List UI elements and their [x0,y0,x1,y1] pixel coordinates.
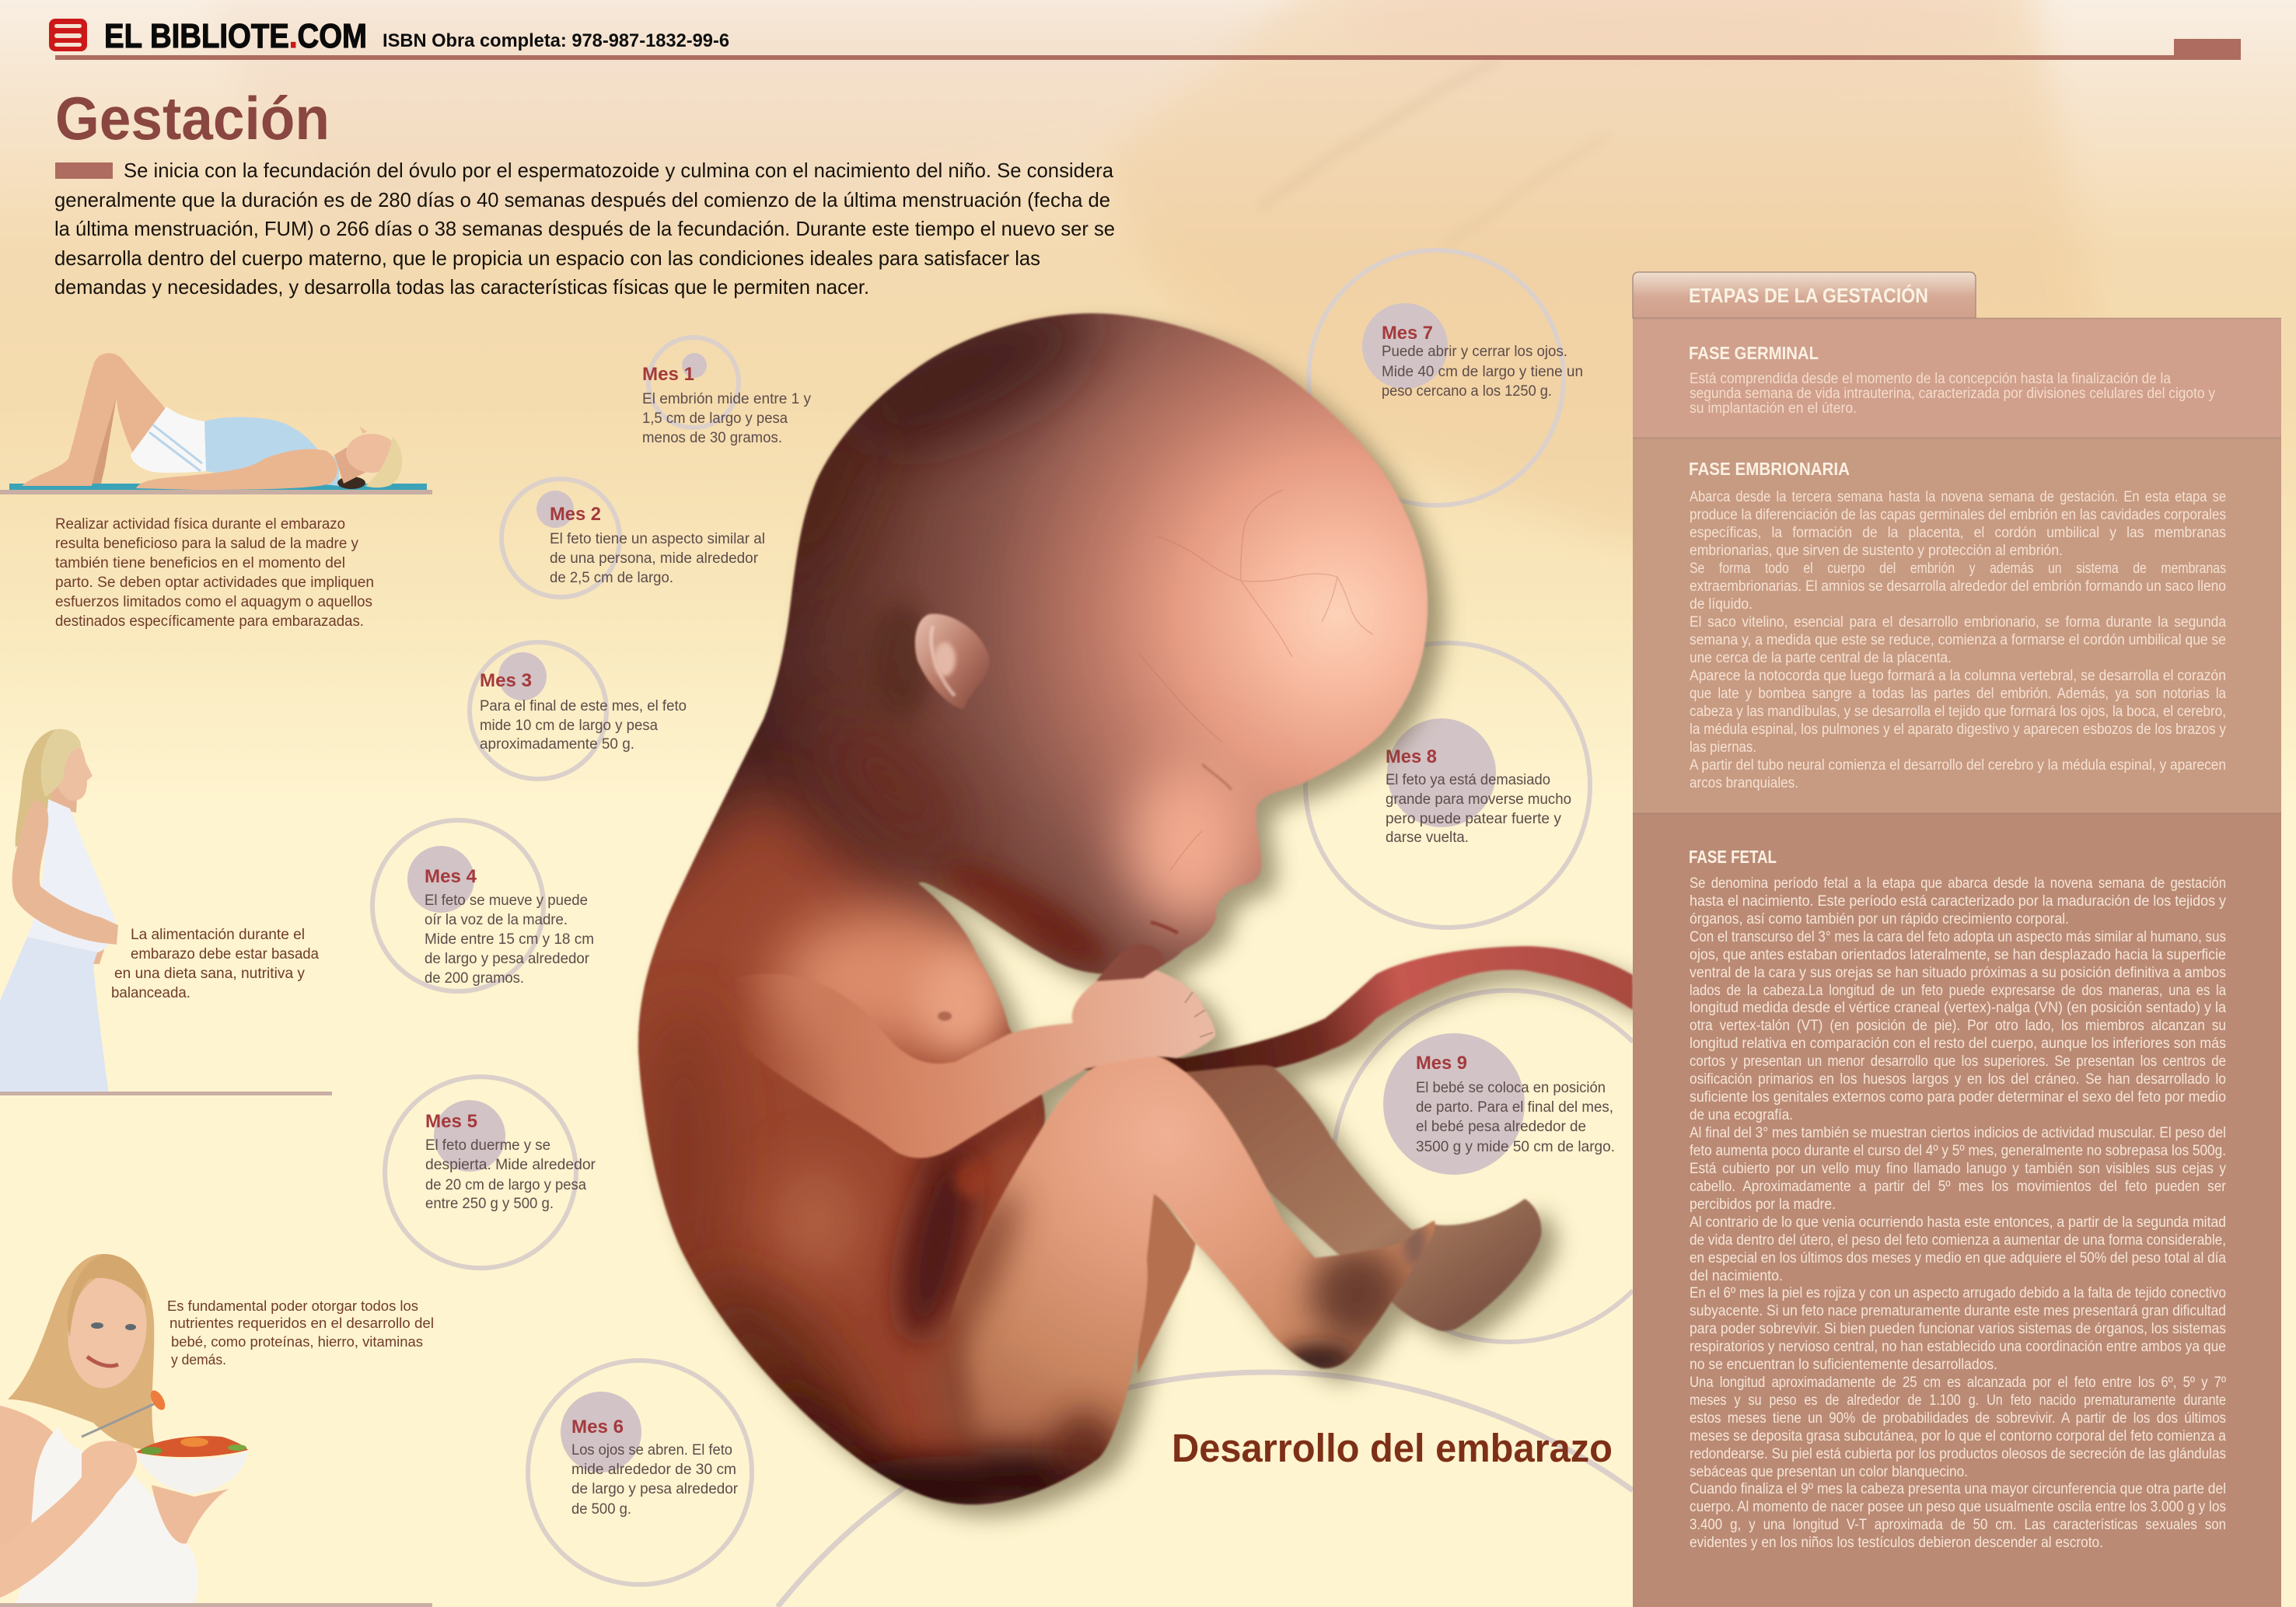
month 9: de parto. Para el final del mes, [1416,1099,1613,1116]
month 6: de 500 g. [571,1501,631,1518]
month 5: El feto duerme y se [425,1137,550,1154]
section: fase fetal [1633,813,2281,1607]
month 4 [372,820,594,991]
section: fase germinal: segunda semana de vida intrauterina, caracterizada por divisiones celulares del cigoto y [1690,386,2215,402]
month 2: El feto tiene un aspecto similar al [550,531,765,547]
month 4: Mes 4 [425,866,477,887]
section: fase fetal: no se encuentran lo suficientemente desarrollados. [1690,1357,1997,1373]
month 7: peso cercano a los 1250 g. [1382,383,1552,400]
month 5: de 20 cm de largo y pesa [425,1177,586,1193]
section: fase fetal: Al final del 3° mes también se muestran ciertos indicios de actividad muscular. El peso del [1690,1125,2226,1141]
far leg [1138,1065,1542,1375]
section: fase embrionaria: semana y, a medida que este se reduce, comienza a formarse el cordón umbilical que se [1690,632,2226,648]
month 1: Mes 1 [642,364,694,385]
text: physical activity [55,516,374,630]
logo wordmark: EL BIBLIOTE.COM [104,17,367,55]
text: nutrition: La alimentación durante el [131,927,305,943]
month 6 [528,1361,752,1584]
month 4: Mide entre 15 cm y 18 cm [425,931,594,948]
section: fase embrionaria: que late y bombea sangre a todas las partes del embrión. Además, ya son notorias la [1690,686,2226,702]
text: physical activity: parto. Se deben optar actividades que impliquen [55,575,374,591]
section: fase fetal: suficiente los genitales externos como para poder determinar el sexo del feto por medio [1690,1089,2226,1106]
section: fase fetal: feto aumenta poco durante el curso del 4º y 5º mes, generalmente no sobrepasa los 500g. [1690,1143,2226,1159]
intro paragraph: la última menstruación, FUM) o 266 días o 38 semanas después de la fecundación. Durante este tiempo el nuevo ser se [54,217,1115,240]
section: fase fetal: En el 6º mes la piel es rojiza y con un aspecto arrugado debido a la falta de tejido conectivo [1690,1285,2226,1301]
month 8: Mes 8 [1386,746,1437,767]
month 5 [385,1077,596,1268]
section: fase fetal: Está cubierto por un vello muy fino llamado lanugo y también son visibles sus cejas y [1690,1161,2226,1177]
header [49,17,2241,60]
panel tab: ETAPAS DE LA GESTACIÓN [1689,284,1928,307]
section: fase embrionaria: produce la diferenciación de las capas germinales del embrión en las cavidades corporales [1690,507,2226,523]
icon: ear [915,613,990,709]
section: fase fetal: evidentes y en los niños los testículos debieron descender al escroto. [1690,1535,2103,1551]
month 8: El feto ya está demasiado [1386,772,1550,788]
heading: desarrollo del embarazo: Desarrollo del embarazo [1172,1426,1613,1470]
month 1 [642,337,811,446]
intro paragraph: demandas y necesidades, y desarrolla todas las características físicas que le permiten nacer. [54,275,869,299]
month 3: mide 10 cm de largo y pesa [480,718,658,734]
section: fase fetal: estos meses tiene un 90% de probabilidades de sobrevivir. A partir de los dos últimos [1690,1410,2226,1427]
section: fase embrionaria: une cerca de la parte central de la placenta. [1690,650,1952,666]
section: fase fetal: Cuando finaliza el 9º mes la cabeza presenta una mayor circunferencia que otra parte del [1690,1481,2226,1497]
section: fase fetal: redondearse. Su piel está cubierta por los productos oleosos de secreción de las glándulas [1690,1446,2226,1462]
photo: woman exercising [9,353,427,490]
intro paragraph: Se inicia con la fecundación del óvulo por el espermatozoide y culmina con el nacimiento del niño. Se considera [124,159,1114,182]
section: fase embrionaria: específicas, la formación de la placenta, el cordón umbilical y las membranas [1690,525,2226,541]
header rule [55,39,2241,60]
month 8 [1305,643,1590,928]
month 4: El feto se mueve y puede [425,893,588,909]
section: fase fetal: osificación primarios en los huesos largos y en los del cráneo. Se han desarrollado lo [1690,1071,2226,1088]
large decorative ring behind title [778,1372,1633,1607]
ISBN: ISBN Obra completa: 978-987-1832-99-6 [383,30,729,51]
eye, lips, nipple [1202,764,1232,790]
month 6: Los ojos se abren. El feto [571,1442,732,1459]
month 8: pero puede patear fuerte y [1386,811,1562,827]
month 2: de 2,5 cm de largo. [550,570,673,586]
month 2: Mes 2 [550,504,601,525]
text: physical activity: destinados específicamente para embarazadas. [55,613,364,630]
month 9: El bebé se coloca en posición [1416,1080,1606,1096]
month 6: de largo y pesa alrededor [571,1481,739,1497]
text: physical activity: también tiene beneficios en el momento del [55,555,345,571]
section: fase germinal: Está comprendida desde el momento de la concepción hasta la finalización de la [1690,371,2171,387]
section: fase embrionaria: Abarca desde la tercera semana hasta la novena semana de gestación. En esta etapa se [1690,489,2226,505]
photo: pregnant woman standing [0,729,118,1094]
section: fase fetal: de una ecografía. [1690,1107,1793,1123]
text: nutrition: balanceada. [111,985,190,1001]
section: fase embrionaria: FASE EMBRIONARIA [1689,459,1850,479]
photo: woman eating salad [0,1254,248,1603]
thumb at mouth [1096,944,1165,981]
section: fase embrionaria: extraembrionarias. El amnios se desarrolla alrededor del embrión formando un saco lleno [1690,578,2226,595]
section: fase fetal: ojos, que antes estaban orientados lateralmente, se han desplazado hacia la superficie [1690,947,2226,963]
section: fase fetal: meses se deposita grasa subcutánea, por lo que el contorno corporal del feto comienza a [1690,1428,2226,1445]
month 7: Puede abrir y cerrar los ojos. [1382,344,1567,360]
section: fase fetal: ventral de la cara y sus orejas se han situado próximas a su posición definitiva a ambos [1690,965,2226,981]
text: physical activity: Realizar actividad física durante el embarazo [55,516,345,533]
section: fase fetal: cabello. Aproximadamente a partir del 5º mes los movimientos del feto pueden ser [1690,1179,2227,1195]
section: fase fetal: subyacente. Si un feto nace prematuramente durante este mes presentará gran dificultad [1690,1303,2226,1319]
month 4: de 200 gramos. [425,970,524,987]
fetus illustration [636,311,1633,1531]
section: fase embrionaria: las piernas. [1690,739,1756,756]
section: fase embrionaria: cabeza y las mandíbulas, y se desarrolla el tejido que formará los ojos, la boca, el cerebro, [1690,704,2226,720]
head and torso [636,312,1429,1506]
section: fase fetal: otra vertex-talón (VT) (en posición de pie). Por otro lado, los miembros alcanzan su [1690,1018,2226,1034]
intro paragraph: desarrolla dentro del cuerpo materno, que le propicia un espacio con las condiciones ideales para satisfacer las [54,246,1040,270]
section: fase embrionaria [1633,438,2281,813]
month 3 [470,642,687,779]
month 1: menos de 30 gramos. [642,430,782,446]
section: fase embrionaria: A partir del tubo neural comienza el desarrollo del cerebro y la médula espinal, y aparecen [1690,757,2226,774]
section: fase embrionaria: arcos branquiales. [1690,775,1798,791]
section: fase fetal: cortos y presentan un menor desarrollo que los superiores. Se presentan los centros de [1690,1053,2226,1070]
month 8: grande para moverse mucho [1386,791,1571,808]
section: fase germinal [1633,318,2281,438]
section: fase fetal: percibidos por la madre. [1690,1197,1836,1213]
section: fase embrionaria: El saco vitelino, esencial para el desarrollo embrionario, se forma durante la segunda [1690,614,2226,631]
section: fase fetal: longitud medida desde el vértice craneal (vertex)-nalga (VN) (en posición sentado) y la [1690,1000,2226,1016]
section: fase fetal: longitud relativa en comparación con el resto del cuerpo, aunque los inferiores son más [1690,1036,2226,1052]
month 9: Mes 9 [1416,1053,1467,1074]
text: physical activity: resulta beneficioso para la salud de la madre y [55,536,358,552]
month 6: Mes 6 [571,1417,624,1438]
section: fase embrionaria: embrionarias, que sirven de sustento y protección al embrión. [1690,543,2063,559]
text: nutrients: nutrientes requeridos en el desarrollo del [169,1315,434,1331]
panel: etapas de la gestación [1633,272,2281,1607]
fetus drop shadow [654,326,1648,1517]
text: nutrition: embarazo debe estar basada [131,946,319,962]
section: fase fetal: lados de la cabeza.La longitud de un feto puede expresarse de dos maneras, una es la [1690,983,2226,999]
month 2 [501,479,765,597]
section: fase fetal: cuerpo. Al momento de nacer posee un peso que usualmente oscila entre los 3.000 g y los [1690,1499,2226,1515]
month 1: 1,5 cm de largo y pesa [642,410,788,427]
section: fase fetal: Al contrario de lo que venia ocurriendo hasta este entonces, a partir de la segunda mitad [1690,1214,2226,1231]
section: fase fetal: Se denomina período fetal a la etapa que abarca desde la novena semana de gestación [1690,875,2226,892]
section: fase embrionaria: la médula espinal, los pulmones y el aparato digestivo y aparecen esbozos de los brazos y [1690,721,2226,738]
section: fase germinal: FASE GERMINAL [1689,343,1819,363]
intro paragraph: generalmente que la duración es de 280 días o 40 semanas después del comienzo de la última menstruación (fecha de [54,188,1110,211]
month 7: Mide 40 cm de largo y tiene un [1382,364,1583,380]
section: fase fetal: hasta el nacimiento. Este período está caracterizado por la maduración de los tejidos y [1690,893,2226,910]
arm and hand [750,969,1216,1159]
section: fase fetal: sebáceas que presentan un color blanquecino. [1690,1464,1968,1480]
month 3: Para el final de este mes, el feto [480,698,687,714]
section: fase fetal: respiratorios y nervioso central, no han establecido una coordinación entre ambos ya que [1690,1339,2226,1355]
month 7: Mes 7 [1382,323,1433,344]
section: fase fetal: del nacimiento. [1690,1268,1783,1284]
month 8: darse vuelta. [1386,830,1469,846]
month 5: Mes 5 [425,1111,477,1132]
month 1: El embrión mide entre 1 y [642,391,811,407]
veins [1138,490,1373,871]
section: fase fetal: 3.400 g, y una longitud V-T aproximada de 50 cm. Las características sexuales son [1690,1517,2226,1533]
section: fase fetal: de vida dentro del útero, el peso del feto comienza a aumentar de una forma considerable, [1690,1232,2226,1249]
text: physical activity: esfuerzos limitados como el aquagym o aquellos [55,594,372,610]
month 9: el bebé pesa alrededor de [1416,1119,1586,1135]
month 9 [1333,990,1633,1342]
panel tab [1633,272,1976,318]
text: nutrition [111,927,319,1001]
section: fase fetal: para poder sobrevivir. Si bien pueden funcionar varios sistemas de órganos, los sistemas [1690,1321,2226,1337]
month 2: de una persona, mide alrededor [550,550,759,567]
umbilical cord [1011,946,1633,1076]
section: fase fetal: Con el transcurso del 3° mes la cara del feto adopta un aspecto más similar al humano, sus [1690,929,2226,945]
text: nutrition: en una dieta sana, nutritiva y [114,966,306,982]
month 5: despierta. Mide alrededor [425,1157,596,1173]
month 3: aproximadamente 50 g. [480,736,634,753]
text: nutrients: y demás. [171,1352,226,1368]
section: fase embrionaria: Aparece la notocorda que luego formará a la columna vertebral, se desarrolla el corazón [1690,668,2226,684]
intro paragraph [54,159,1115,299]
month 4: oír la voz de la madre. [425,912,568,928]
section: fase fetal: Una longitud aproximadamente de 25 cm es alcanzada por el feto entre los 6º, 5º y 7º [1690,1375,2226,1391]
text: nutrients: bebé, como proteínas, hierro, vitaminas [171,1334,423,1350]
month 7 [1309,250,1583,505]
text: nutrients: Es fundamental poder otorgar todos los [167,1298,418,1314]
month 5: entre 250 g y 500 g. [425,1196,554,1212]
section: fase embrionaria: de líquido. [1690,596,1753,613]
icon: logo [49,19,87,51]
section: fase germinal: su implantación en el útero. [1690,400,1857,417]
month 6: mide alrededor de 30 cm [571,1462,736,1478]
near leg [952,1056,1437,1504]
month 4: de largo y pesa alrededor [425,951,590,967]
text: nutrients [167,1298,434,1368]
month 3: Mes 3 [480,670,532,691]
month 9: 3500 g y mide 50 cm de largo. [1416,1139,1615,1155]
section: fase fetal: FASE FETAL [1689,847,1777,867]
title: Gestación [55,84,330,152]
section: fase fetal: órganos, así como también por un rápido crecimiento corporal. [1690,911,2069,928]
section: fase fetal: en especial en los últimos dos meses y medio en que adquiere el 50% del peso total al día [1690,1250,2226,1266]
